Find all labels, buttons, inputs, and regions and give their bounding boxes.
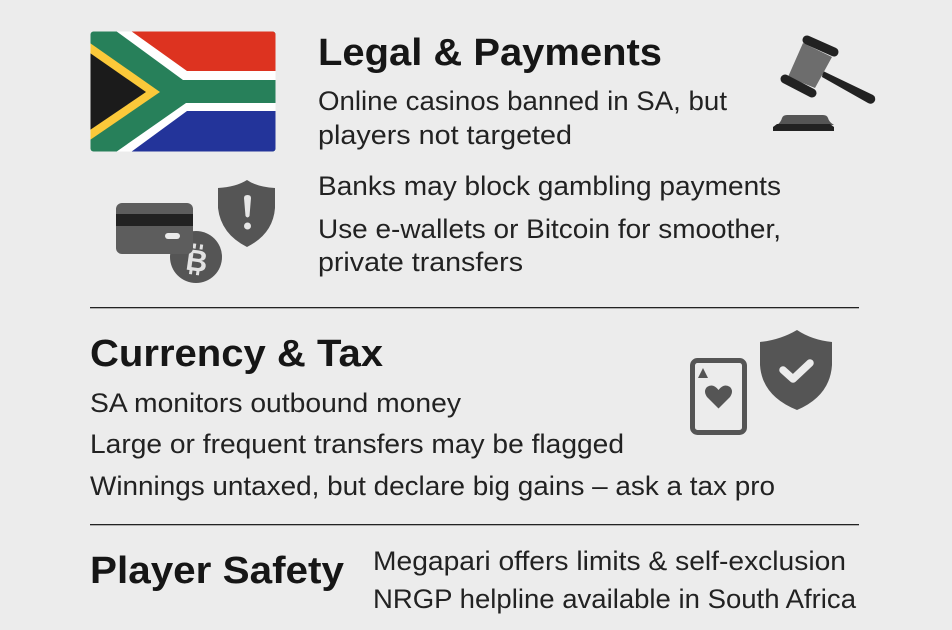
heading: Player Safety: Player Safety xyxy=(90,550,344,592)
text: flagged transfers: Large or frequent transfers may be flagged xyxy=(90,429,624,459)
text: e-wallets: Use e-wallets or Bitcoin for smoother, xyxy=(318,214,781,244)
text: legal status line 2: players not targeted xyxy=(318,120,572,150)
text: winnings untaxed: Winnings untaxed, but declare big gains – ask a tax pro xyxy=(90,471,775,501)
heading: Legal & Payments: Legal & Payments xyxy=(318,32,662,74)
heading: Currency & Tax: Currency & Tax xyxy=(90,333,383,375)
text: bank blocks: Banks may block gambling payments xyxy=(318,171,781,201)
text: e-wallets line 2: private transfers xyxy=(318,247,523,277)
icon: playing card and check shield xyxy=(692,330,832,432)
text: helpline: NRGP helpline available in South Africa xyxy=(373,584,857,614)
text: legal status: Online casinos banned in SA, but xyxy=(318,86,728,116)
text: outbound money: SA monitors outbound money xyxy=(90,388,462,418)
icon: credit card, bitcoin and warning shield xyxy=(116,180,275,283)
icon: credit card, bitcoin and warning shield: B xyxy=(184,244,210,279)
icon: gavel xyxy=(773,40,875,131)
icon: South African flag xyxy=(90,31,276,152)
text: limits: Megapari offers limits & self-exclusion xyxy=(373,546,846,576)
